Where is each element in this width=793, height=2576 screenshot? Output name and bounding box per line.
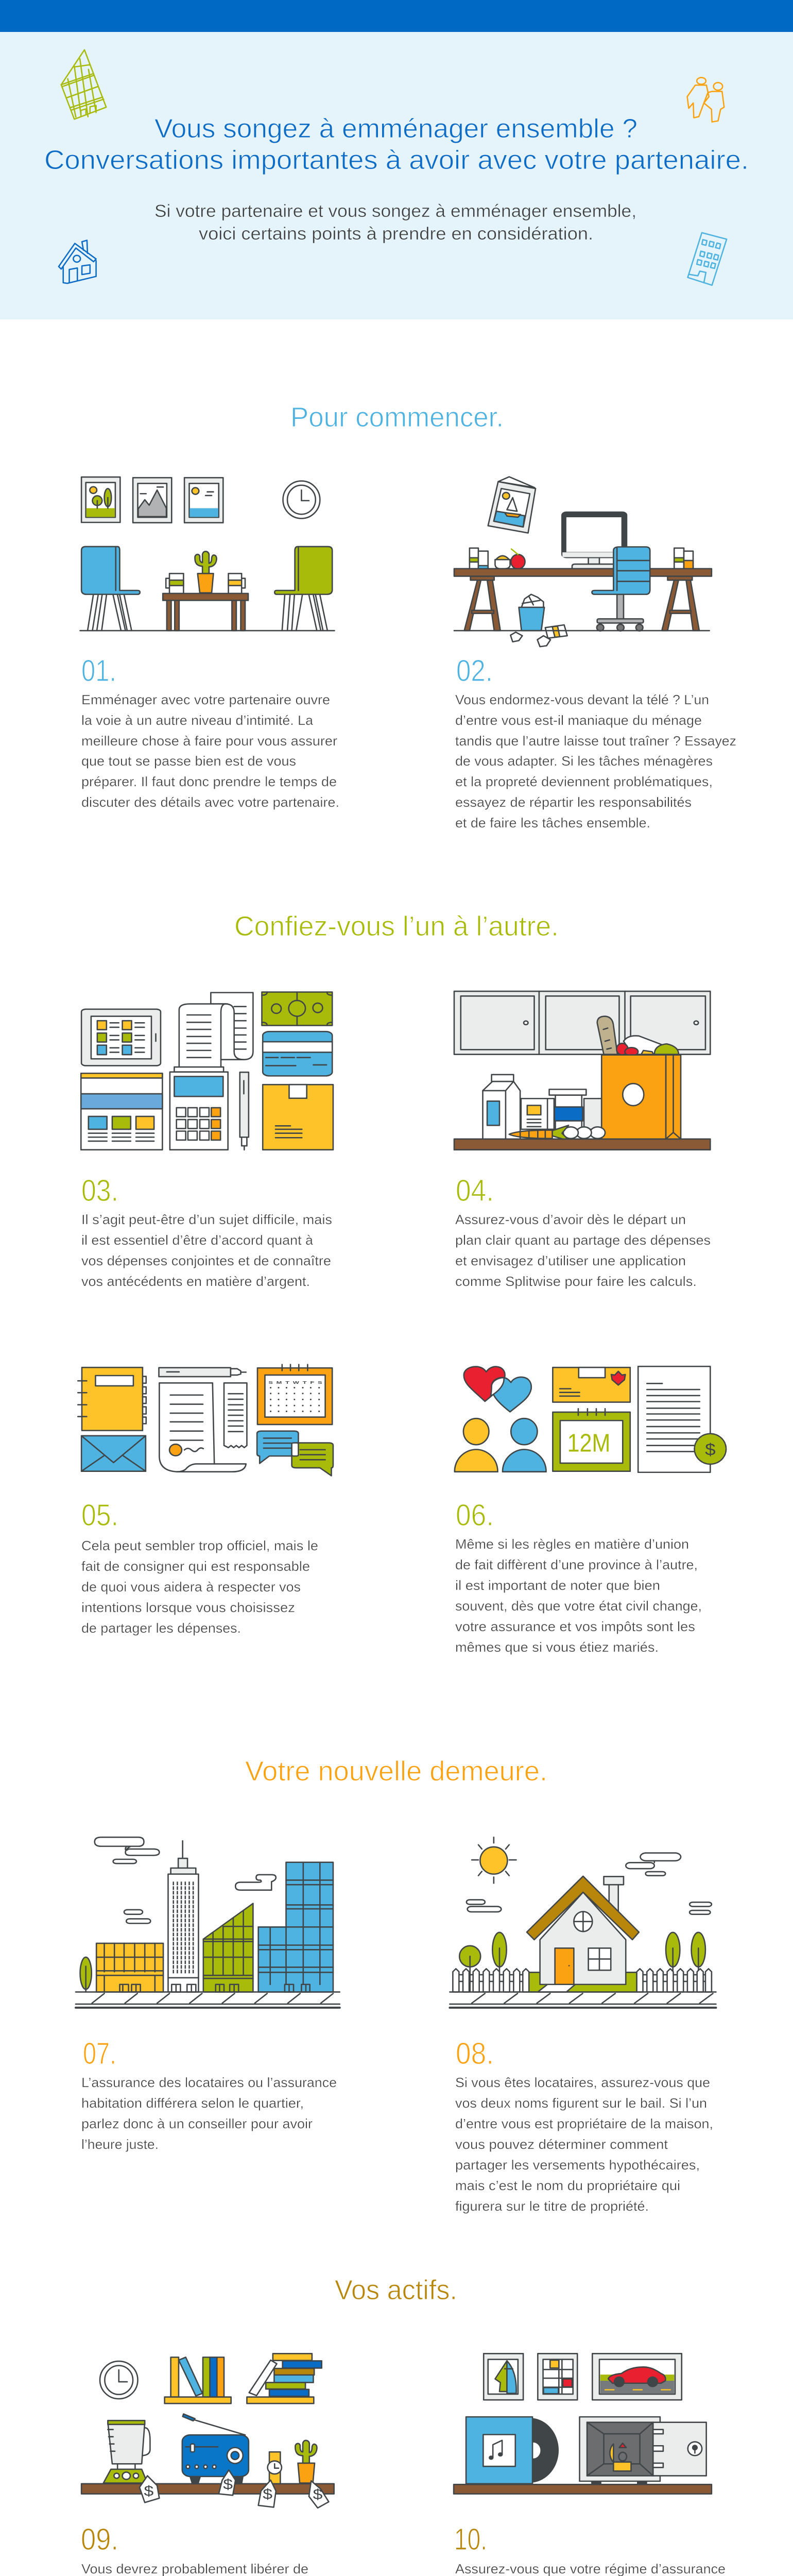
text 04: et envisagez d’utiliser une application <box>455 1253 686 1268</box>
number 07: 07. <box>83 2037 116 2071</box>
text 05: Cela peut sembler trop officiel, mais le <box>81 1538 318 1553</box>
illustration 08: house <box>450 1837 716 2008</box>
text 07: L’assurance des locataires ou l’assurance <box>81 2075 337 2090</box>
text 06: de fait diffèrent d’une province à l’autre, <box>455 1557 698 1572</box>
title: Conversations importantes à avoir avec votre partenaire. <box>44 145 749 175</box>
bag contents <box>597 1016 679 1056</box>
icon: house <box>59 240 96 283</box>
text 06: votre assurance et vos impôts sont les <box>455 1619 695 1634</box>
illustration 04: groceries <box>454 991 710 1150</box>
illustration 09: belongings with price tags <box>81 2353 334 2508</box>
sun <box>472 1837 516 1883</box>
calendar <box>257 1365 332 1425</box>
notebook <box>78 1367 146 1431</box>
text 02: Vous endormez-vous devant la télé ? L’un <box>455 692 709 707</box>
blue building <box>258 1862 333 1992</box>
text 04 <box>455 1212 711 1289</box>
calendar: SMTWTFS <box>268 1380 322 1385</box>
intro text <box>154 201 636 244</box>
portrait frame <box>484 2353 523 2400</box>
eggs and carrot <box>509 1125 605 1141</box>
safe <box>580 2417 706 2484</box>
trees <box>459 1933 705 1992</box>
text 03: vos antécédents en matière d’argent. <box>81 1274 310 1289</box>
paper bag <box>601 1055 681 1139</box>
text 02: de vous adapter. Si les tâches ménagères <box>455 753 713 769</box>
banknote <box>262 992 332 1025</box>
top band <box>0 0 793 32</box>
number 05: 05. <box>81 1498 118 1532</box>
illustration 06: common-law union <box>455 1366 726 1472</box>
text 06 <box>455 1536 702 1655</box>
green building <box>203 1904 253 1992</box>
text 08: mais c’est le nom du propriétaire qui <box>455 2178 680 2193</box>
monitor <box>562 512 627 569</box>
envelope <box>81 1436 146 1471</box>
illustration 05: paperwork <box>78 1365 333 1476</box>
desk items <box>470 548 693 569</box>
text 01: discuter des détails avec votre partenaire. <box>81 794 339 810</box>
text 01: la voie à un autre niveau d’intimité. La <box>81 713 314 728</box>
receipt <box>224 1383 247 1448</box>
text 08: figurera sur le titre de propriété. <box>455 2198 649 2214</box>
intro text: Si votre partenaire et vous songez à emménager ensemble, <box>154 201 636 221</box>
text 01: préparer. Il faut donc prendre le temps de <box>81 774 337 789</box>
speech bubbles <box>257 1431 333 1476</box>
text 02: et la propreté deviennent problématiques, <box>455 774 713 789</box>
text 06: souvent, dès que votre état civil change, <box>455 1598 702 1614</box>
text 03: il est essentiel d’être d’accord quant à <box>81 1232 314 1248</box>
title <box>44 114 749 175</box>
text 05 <box>81 1538 318 1636</box>
number 02: 02. <box>456 654 493 688</box>
agreement page <box>159 1383 246 1472</box>
number 01: 01. <box>81 654 116 688</box>
text 05: intentions lorsque vous choisissez <box>81 1600 295 1615</box>
parcel <box>263 1084 333 1150</box>
street <box>76 1992 340 2008</box>
receipts <box>179 993 253 1067</box>
blender <box>104 2420 150 2483</box>
text 01: Emménager avec votre partenaire ouvre <box>81 692 330 707</box>
number 10: 10. <box>454 2522 487 2556</box>
text 04: plan clair quant au partage des dépenses <box>455 1232 711 1248</box>
text 08: d’entre vous est propriétaire de la maison, <box>455 2116 713 2131</box>
number 04: 04. <box>456 1174 494 1208</box>
credit card <box>263 1031 332 1076</box>
text 02: essayez de répartir les responsabilités <box>455 794 692 810</box>
clouds <box>95 1837 276 1923</box>
text 07 <box>81 2075 337 2152</box>
potted cactus <box>295 2441 317 2483</box>
text 05: de quoi vous aidera à respecter vos <box>81 1579 301 1595</box>
text 06: il est important de noter que bien <box>455 1578 660 1593</box>
text 08: partager les versements hypothécaires, <box>455 2157 700 2173</box>
wall frames <box>81 477 223 523</box>
side table with plant and mugs <box>163 551 248 631</box>
cabinets <box>454 991 710 1055</box>
abstract frame <box>538 2353 577 2400</box>
price tags <box>140 2470 329 2508</box>
green chair <box>274 547 332 631</box>
text 08: vous pouvez déterminer comment <box>455 2137 668 2152</box>
text 05: fait de consigner qui est responsable <box>81 1558 310 1574</box>
pen <box>159 1368 246 1377</box>
calculator <box>170 1067 228 1150</box>
document with seal <box>638 1366 726 1472</box>
text 08: Si vous êtes locataires, assurez-vous que <box>455 2075 710 2090</box>
price tags: $ <box>223 2476 233 2493</box>
12-month calendar <box>553 1409 630 1471</box>
number 03: 03. <box>81 1174 118 1208</box>
price tags: $ <box>144 2483 153 2499</box>
heading: Vos actifs: Vos actifs. <box>335 2275 457 2306</box>
heading: Confiez-vous: Confiez-vous l’un à l’autre. <box>234 911 559 942</box>
title: Vous songez à emménager ensemble ? <box>154 114 637 144</box>
house <box>527 1876 639 1992</box>
header panel <box>0 32 793 319</box>
text 03: Il s’agit peut-être d’un sujet difficile, mais <box>81 1212 332 1227</box>
fences <box>453 1969 712 1992</box>
pen <box>240 1072 249 1150</box>
bookshelf right <box>247 2353 322 2403</box>
text 01 <box>81 692 339 810</box>
price tags: $ <box>313 2486 322 2502</box>
text 04: Assurez-vous d’avoir dès le départ un <box>455 1212 686 1227</box>
office chair <box>592 547 650 631</box>
icon: two people <box>687 78 724 122</box>
number 08: 08. <box>456 2037 494 2071</box>
text 02: d’entre vous est-il maniaque du ménage <box>455 713 702 728</box>
hearts <box>464 1367 531 1412</box>
blue chair <box>81 547 140 631</box>
text 02: tandis que l’autre laisse tout traîner ? Essayez <box>455 733 736 749</box>
heading: Votre nouvelle demeure: Votre nouvelle demeure. <box>245 1756 547 1787</box>
statement <box>81 1073 162 1150</box>
text 03: vos dépenses conjointes et de connaître <box>81 1253 331 1268</box>
clouds <box>467 1853 712 1914</box>
text 01: meilleure chose à faire pour vous assurer <box>81 733 337 749</box>
street <box>450 1992 716 2008</box>
tilted picture <box>488 477 536 533</box>
text 06: Même si les règles en matière d’union <box>455 1536 689 1552</box>
text 07: habitation différera selon le quartier, <box>81 2095 304 2111</box>
heading: Pour commencer: Pour commencer. <box>290 402 504 433</box>
text 03 <box>81 1212 332 1289</box>
waste bin and papers <box>510 595 567 647</box>
illustration 10: valuables <box>454 2353 712 2494</box>
text 07: parlez donc à un conseiller pour avoir <box>81 2116 313 2131</box>
lawn <box>529 1972 637 1992</box>
number 06: 06. <box>456 1498 494 1532</box>
text 04: comme Splitwise pour faire les calculs. <box>455 1274 697 1289</box>
tree <box>80 1957 92 1992</box>
radio <box>182 2414 249 2484</box>
document with seal: $ <box>705 1440 716 1459</box>
watch <box>268 2452 282 2484</box>
mail <box>553 1367 630 1402</box>
price tags: $ <box>263 2486 272 2502</box>
illustration 03: finances <box>81 992 333 1150</box>
couple <box>455 1418 546 1472</box>
text 06: mêmes que si vous étiez mariés. <box>455 1639 659 1655</box>
clock <box>100 2361 138 2399</box>
illustration 07: city buildings <box>76 1837 340 2008</box>
yellow building <box>96 1943 163 1992</box>
tower <box>168 1841 198 1992</box>
text 02: et de faire les tâches ensemble. <box>455 815 650 831</box>
illustration 01: dining corner <box>80 477 335 631</box>
intro text: voici certains points à prendre en considération. <box>199 224 593 244</box>
car frame <box>592 2353 682 2400</box>
text 07: l’heure juste. <box>81 2137 159 2152</box>
desk <box>454 569 712 631</box>
text 02 <box>455 692 736 831</box>
bookshelf left <box>165 2357 231 2403</box>
icon: green building <box>61 50 106 119</box>
icon: apartment building <box>688 233 727 285</box>
vinyl record <box>466 2417 558 2484</box>
text 01: que tout se passe bien est de vous <box>81 753 296 769</box>
text 08 <box>455 2075 713 2214</box>
milk and packages <box>483 1075 601 1139</box>
tablet <box>81 1009 161 1065</box>
text 05: de partager les dépenses. <box>81 1620 241 1636</box>
wall clock <box>283 481 320 518</box>
illustration 02: messy desk <box>454 477 712 647</box>
number 09: 09. <box>81 2522 118 2556</box>
12-month calendar: 12M <box>567 1429 610 1457</box>
text 08: vos deux noms figurent sur le bail. Si l’un <box>455 2095 707 2111</box>
